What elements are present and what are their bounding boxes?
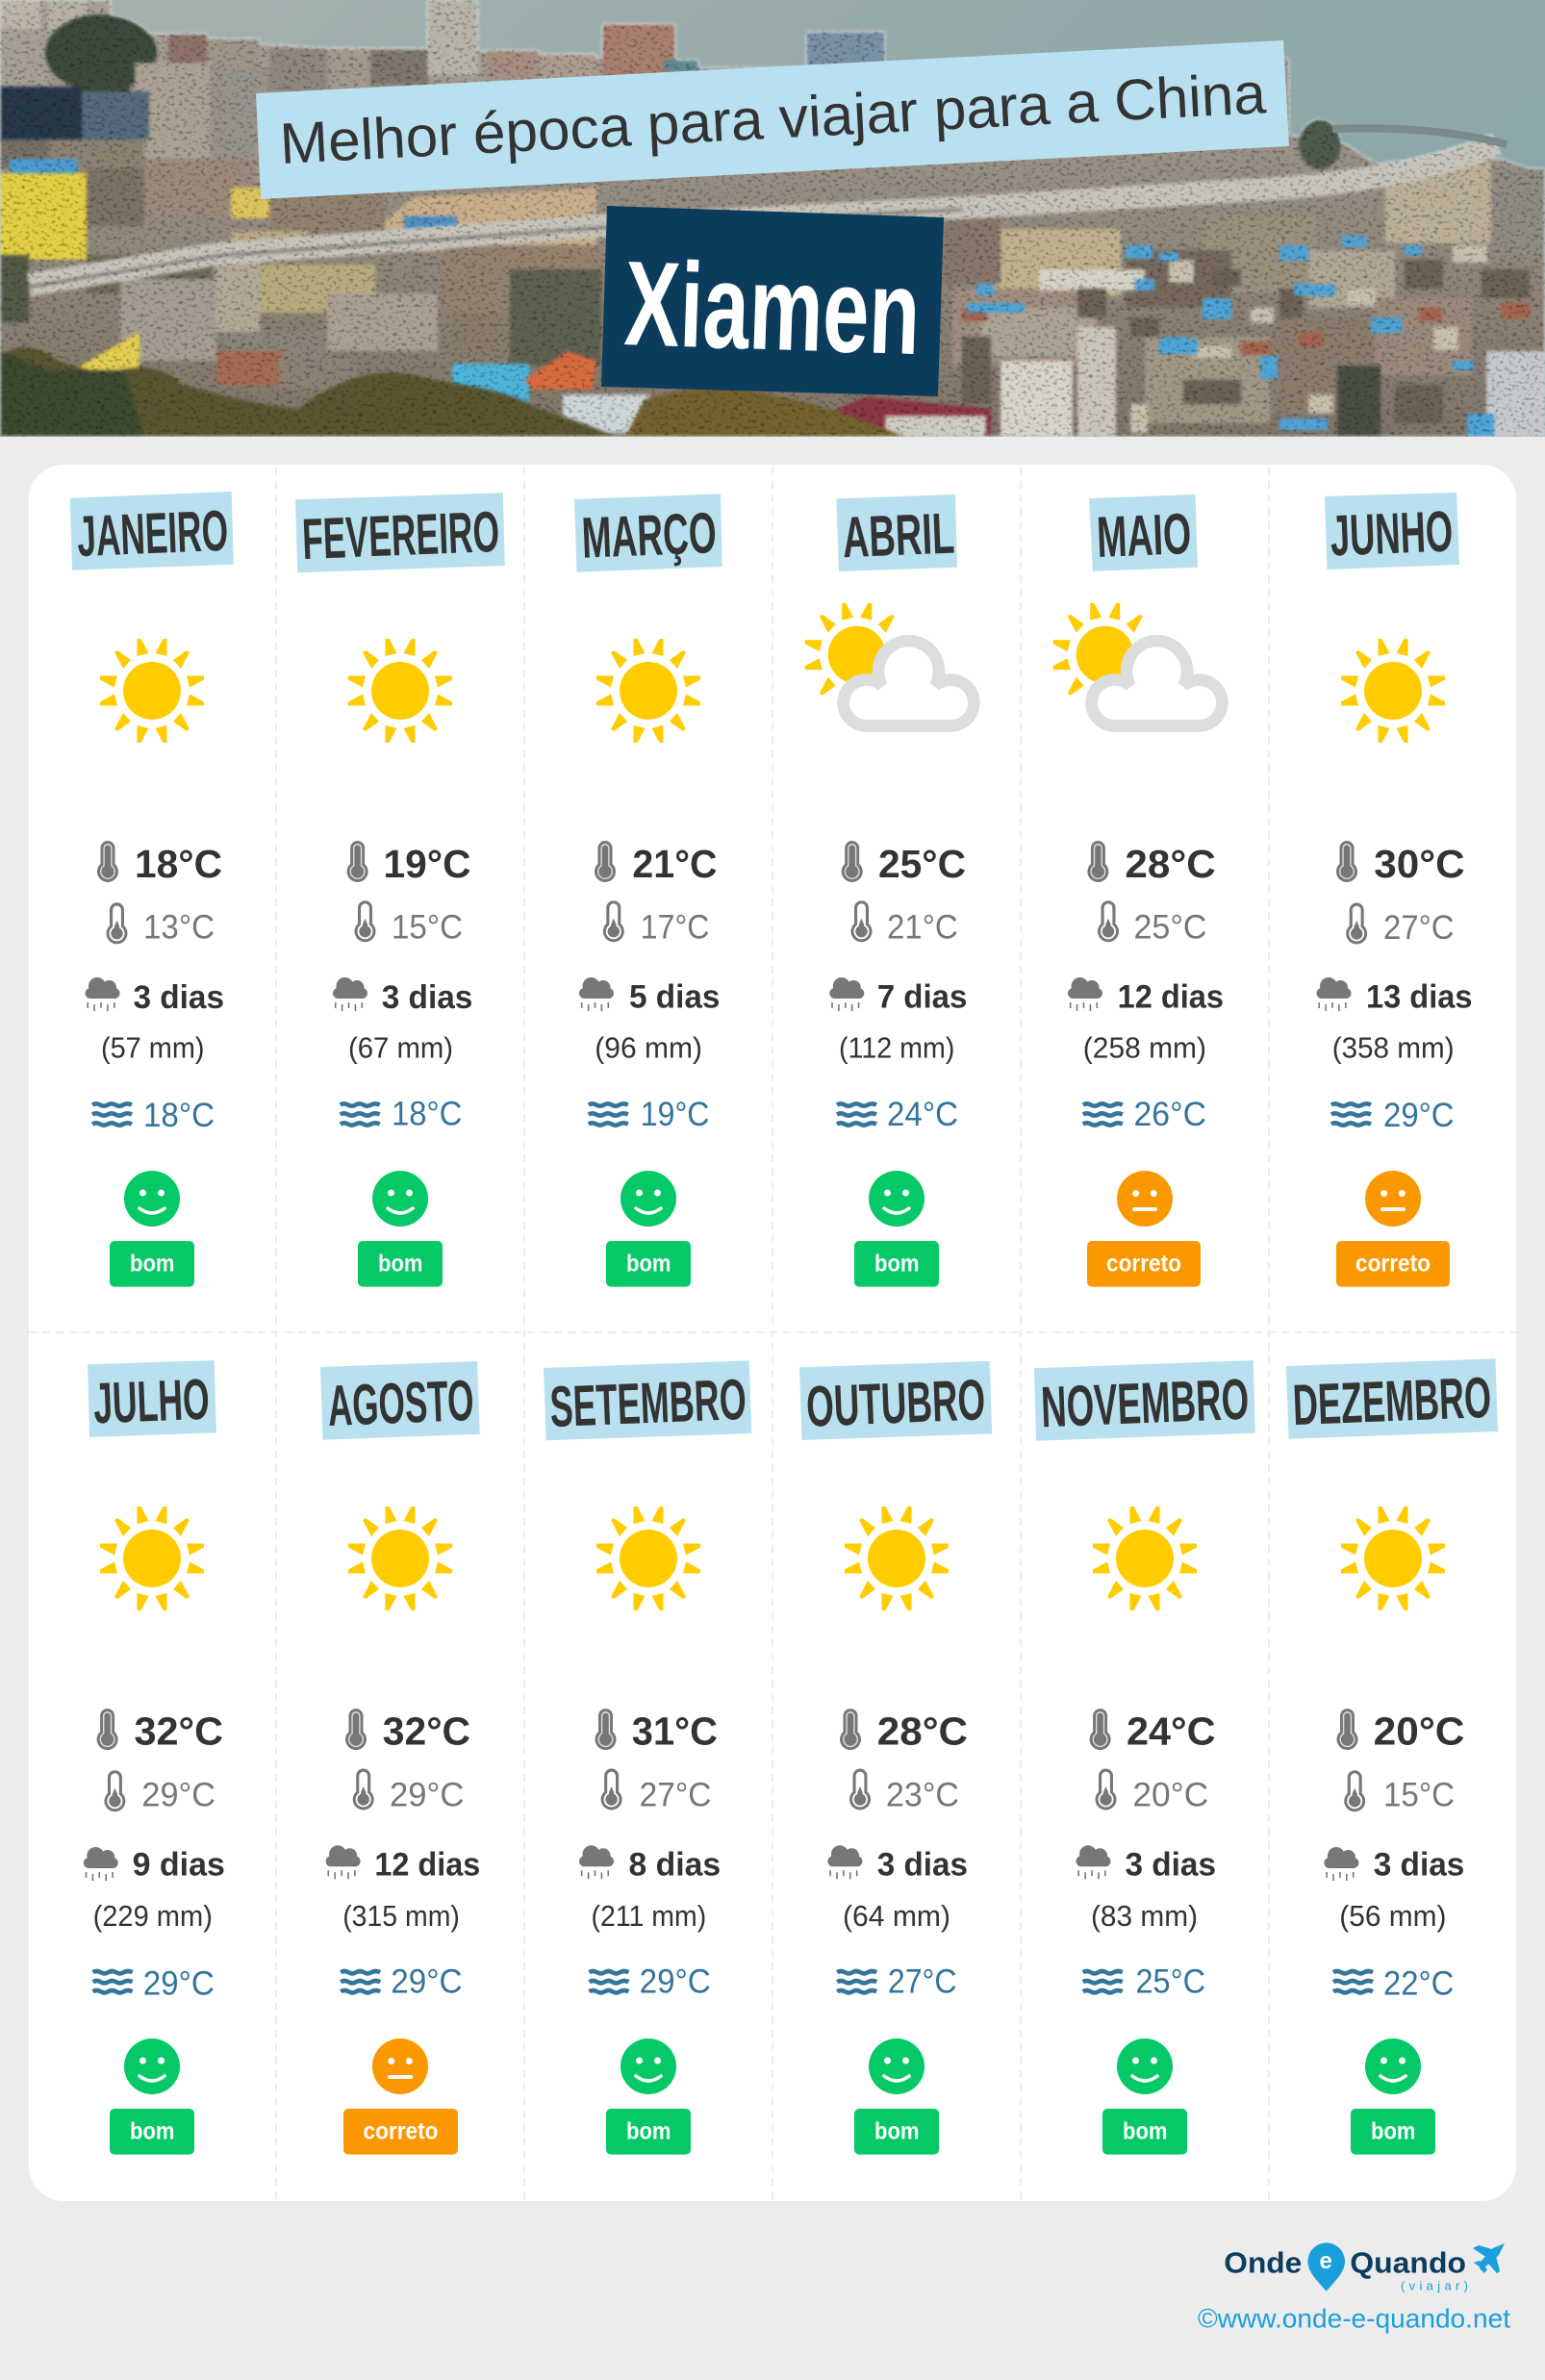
- label: AGOSTO: [326, 1368, 475, 1438]
- label: [320, 1361, 480, 1440]
- label: [1034, 1360, 1255, 1441]
- icon: sun: [845, 1506, 949, 1610]
- icon: rain: [1316, 977, 1351, 1011]
- sea temperature: 29°C: [1383, 1097, 1455, 1134]
- source URL: ©www.onde-e-quando.net: [1198, 2303, 1510, 2333]
- icon: sun: [596, 639, 700, 743]
- min temperature: 13°C: [143, 909, 215, 947]
- icon: map pin: e: [1320, 2248, 1332, 2274]
- icon: sea waves: [341, 1971, 380, 1992]
- icon: thermometer min: [354, 900, 375, 942]
- icon: thermometer min: [106, 902, 127, 944]
- rating badge: bom: [130, 2118, 175, 2145]
- rating badge: bom: [1123, 2118, 1168, 2145]
- rainfall: (358 mm): [1332, 1031, 1455, 1065]
- max temperature: 19°C: [383, 842, 471, 886]
- icon: happy face: [621, 1171, 676, 1227]
- month: Outubro: [799, 1361, 992, 2155]
- hero photo: Xiamen city and bay: [0, 0, 1545, 437]
- rain days: 13 dias: [1366, 979, 1472, 1016]
- icon: sea waves: [589, 1103, 628, 1126]
- rating badge: bom: [130, 1251, 175, 1278]
- rating badge: bom: [1371, 2118, 1416, 2145]
- icon: thermometer max: [840, 1709, 861, 1750]
- rating badge: bom: [378, 1251, 423, 1278]
- rating badge: bom: [874, 2118, 920, 2145]
- month: Dezembro: [1286, 1358, 1498, 2155]
- max temperature: 31°C: [632, 1709, 718, 1753]
- rainfall: (112 mm): [839, 1031, 954, 1065]
- icon: sun: [100, 639, 204, 743]
- rating badge: [358, 1241, 443, 1287]
- rain days: 12 dias: [1118, 979, 1224, 1016]
- icon: happy face: [372, 1171, 428, 1227]
- rainfall: (56 mm): [1339, 1899, 1447, 1933]
- icon: rain: [579, 1845, 614, 1879]
- rain days: 8 dias: [629, 1847, 721, 1884]
- icon: happy face: [869, 2038, 924, 2094]
- label: [295, 493, 505, 572]
- sea temperature: 29°C: [391, 1963, 462, 2001]
- min temperature: 21°C: [887, 908, 958, 947]
- label: MAIO: [1096, 501, 1192, 570]
- min temperature: 27°C: [1383, 909, 1455, 947]
- rainfall: (315 mm): [342, 1899, 460, 1933]
- label: [544, 1360, 751, 1440]
- rating badge: [606, 2109, 691, 2155]
- icon: thermometer max: [345, 1709, 367, 1750]
- icon: thermometer max: [97, 841, 118, 882]
- sea temperature: 19°C: [641, 1096, 709, 1133]
- icon: thermometer min: [104, 1770, 125, 1811]
- max temperature: 25°C: [878, 842, 966, 886]
- rating badge: bom: [626, 1251, 671, 1278]
- min temperature: 20°C: [1132, 1776, 1208, 1814]
- icon: map pin: [1307, 2242, 1345, 2291]
- icon: rain: [1068, 977, 1102, 1011]
- icon: thermometer min: [603, 900, 624, 942]
- rating badge: [854, 2109, 939, 2155]
- rating badge: [606, 1241, 691, 1287]
- month: Julho: [84, 1360, 225, 2155]
- icon: rain: [829, 977, 864, 1011]
- min temperature: 23°C: [886, 1776, 959, 1814]
- icon: thermometer min: [1346, 902, 1367, 945]
- icon: neutral face: [372, 2038, 428, 2094]
- panel: monthly climate card: [29, 465, 1516, 2201]
- label: MARÇO: [580, 500, 718, 570]
- label: ABRIL: [842, 501, 955, 570]
- min temperature: 27°C: [640, 1776, 711, 1814]
- icon: rain: [827, 1845, 862, 1879]
- icon: sun behind cloud: [1053, 603, 1222, 726]
- icon: sun: [596, 1506, 700, 1610]
- rainfall: (57 mm): [101, 1031, 204, 1065]
- icon: sun: [1341, 639, 1445, 743]
- sea temperature: 22°C: [1383, 1964, 1454, 2002]
- icon: sea waves: [837, 1103, 876, 1126]
- icon: thermometer max: [842, 841, 863, 882]
- label: [836, 494, 957, 571]
- icon: thermometer max: [1337, 1709, 1358, 1750]
- logo: Onde e Quando: Onde: [1224, 2246, 1302, 2280]
- rain days: 3 dias: [133, 979, 224, 1016]
- title banner: [256, 40, 1289, 199]
- city name box: [601, 206, 944, 396]
- rating badge: [1351, 2109, 1435, 2155]
- min temperature: 15°C: [1383, 1776, 1455, 1814]
- max temperature: 21°C: [632, 842, 717, 886]
- icon: rain: [1324, 1847, 1358, 1881]
- month: Abril: [805, 494, 974, 1287]
- month: Janeiro: [70, 492, 234, 1287]
- icon: happy face: [869, 1171, 924, 1227]
- label: [88, 1360, 216, 1437]
- rain days: 5 dias: [629, 979, 720, 1016]
- label: NOVEMBRO: [1040, 1367, 1250, 1439]
- month: Novembro: [1034, 1360, 1255, 2155]
- label: [799, 1361, 992, 1440]
- max temperature: 24°C: [1127, 1709, 1216, 1753]
- rainfall: (83 mm): [1091, 1899, 1198, 1933]
- min temperature: 17°C: [641, 908, 709, 947]
- icon: neutral face: [1117, 1171, 1173, 1227]
- rating badge: [1087, 1241, 1201, 1287]
- month: Maio: [1053, 494, 1224, 1287]
- city name: Xiamen: [622, 237, 923, 380]
- icon: thermometer max: [97, 1709, 118, 1750]
- icon: sea waves: [1333, 1971, 1373, 1992]
- rain days: 12 dias: [374, 1847, 480, 1884]
- icon: thermometer min: [353, 1768, 374, 1810]
- rating badge: [1102, 2109, 1187, 2155]
- logo: Onde e Quando: Quando: [1350, 2246, 1466, 2280]
- rating badge: bom: [626, 2118, 671, 2145]
- rating badge: correto: [364, 2118, 439, 2145]
- month: Junho: [1316, 493, 1472, 1287]
- min temperature: 15°C: [392, 909, 463, 947]
- label: JANEIRO: [76, 498, 229, 569]
- icon: thermometer min: [601, 1768, 622, 1810]
- sea temperature: 18°C: [392, 1095, 462, 1133]
- icon: sea waves: [1083, 1103, 1123, 1126]
- icon: sea waves: [589, 1971, 629, 1992]
- icon: sea waves: [341, 1103, 380, 1126]
- max temperature: 28°C: [877, 1709, 968, 1753]
- rain days: 3 dias: [877, 1847, 968, 1884]
- icon: rain: [1076, 1845, 1110, 1879]
- icon: thermometer min: [849, 1768, 871, 1810]
- icon: sun: [1093, 1506, 1197, 1610]
- icon: sea waves: [1331, 1103, 1371, 1126]
- icon: thermometer max: [595, 1709, 616, 1750]
- icon: rain: [579, 977, 614, 1011]
- rainfall: (67 mm): [348, 1031, 453, 1065]
- sea temperature: 27°C: [888, 1963, 956, 2001]
- icon: sun behind cloud: [805, 603, 974, 726]
- max temperature: 28°C: [1125, 842, 1216, 886]
- icon: sun: [348, 1506, 452, 1610]
- icon: happy face: [1365, 2038, 1421, 2094]
- max temperature: 18°C: [135, 842, 222, 886]
- icon: sea waves: [92, 1103, 132, 1126]
- label: [574, 494, 722, 572]
- label: FEVEREIRO: [301, 499, 500, 571]
- rating badge: [854, 1241, 939, 1287]
- icon: neutral face: [1365, 1171, 1421, 1227]
- rainfall: (64 mm): [843, 1899, 950, 1933]
- icon: thermometer max: [595, 841, 616, 882]
- icon: rain: [85, 977, 119, 1011]
- icon: rain: [84, 1847, 118, 1881]
- icon: thermometer max: [347, 841, 368, 882]
- label: JUNHO: [1330, 498, 1454, 569]
- sea temperature: 24°C: [887, 1096, 958, 1133]
- min temperature: 25°C: [1133, 908, 1206, 947]
- title text: Melhor época para viajar para a China: [278, 61, 1268, 176]
- rating badge: [110, 1241, 194, 1287]
- icon: thermometer min: [850, 900, 872, 942]
- icon: sea waves: [837, 1971, 876, 1992]
- sea temperature: 29°C: [640, 1963, 711, 2001]
- sea temperature: 26°C: [1133, 1096, 1206, 1133]
- rainfall: (96 mm): [595, 1031, 702, 1065]
- label: JULHO: [92, 1367, 211, 1435]
- min temperature: 29°C: [141, 1776, 215, 1814]
- icon: thermometer max: [1087, 841, 1108, 882]
- month: Agosto: [320, 1361, 480, 2155]
- icon: thermometer min: [1344, 1770, 1365, 1811]
- max temperature: 30°C: [1374, 842, 1465, 886]
- icon: airplane: [1473, 2243, 1505, 2273]
- rating badge: [110, 2109, 194, 2155]
- month: Setembro: [544, 1360, 751, 2155]
- label: OUTUBRO: [805, 1367, 986, 1439]
- max temperature: 32°C: [135, 1709, 223, 1753]
- rain days: 3 dias: [1374, 1847, 1464, 1884]
- rain days: 7 dias: [877, 979, 967, 1016]
- label: [70, 492, 234, 570]
- rating badge: correto: [1106, 1251, 1181, 1278]
- label: SETEMBRO: [548, 1367, 747, 1439]
- rating badge: [343, 2109, 458, 2155]
- label: [1089, 494, 1198, 571]
- rainfall: (211 mm): [591, 1899, 706, 1933]
- icon: sun: [348, 639, 452, 743]
- icon: thermometer max: [1336, 841, 1357, 882]
- rating badge: correto: [1355, 1251, 1431, 1278]
- logo: Onde e Quando: (viajar): [1401, 2279, 1468, 2293]
- sea temperature: 18°C: [143, 1097, 215, 1134]
- icon: thermometer min: [1098, 900, 1119, 942]
- icon: sun: [1341, 1506, 1445, 1610]
- sea temperature: 25°C: [1135, 1963, 1205, 2001]
- max temperature: 32°C: [383, 1709, 470, 1753]
- month: Março: [574, 494, 722, 1287]
- icon: happy face: [124, 1171, 180, 1227]
- icon: happy face: [124, 2038, 180, 2094]
- rain days: 3 dias: [1126, 1847, 1216, 1884]
- rainfall: (229 mm): [93, 1899, 213, 1933]
- sea temperature: 29°C: [143, 1964, 215, 2002]
- icon: sun: [100, 1506, 204, 1610]
- icon: thermometer min: [1095, 1768, 1116, 1810]
- rating badge: bom: [874, 1251, 920, 1278]
- label: [1325, 493, 1459, 570]
- icon: rain: [333, 977, 367, 1011]
- icon: happy face: [621, 2038, 676, 2094]
- icon: happy face: [1117, 2038, 1173, 2094]
- rainfall: (258 mm): [1083, 1031, 1206, 1065]
- icon: sea waves: [1083, 1971, 1123, 1992]
- icon: thermometer max: [1090, 1709, 1111, 1750]
- max temperature: 20°C: [1374, 1709, 1464, 1753]
- logo: Onde e Quando: [1224, 2242, 1505, 2293]
- month: Fevereiro: [295, 493, 505, 1287]
- rain days: 9 dias: [133, 1847, 225, 1884]
- min temperature: 29°C: [390, 1776, 464, 1814]
- icon: sea waves: [93, 1971, 133, 1992]
- rain days: 3 dias: [382, 979, 472, 1016]
- icon: rain: [326, 1845, 361, 1879]
- rating badge: [1336, 1241, 1450, 1287]
